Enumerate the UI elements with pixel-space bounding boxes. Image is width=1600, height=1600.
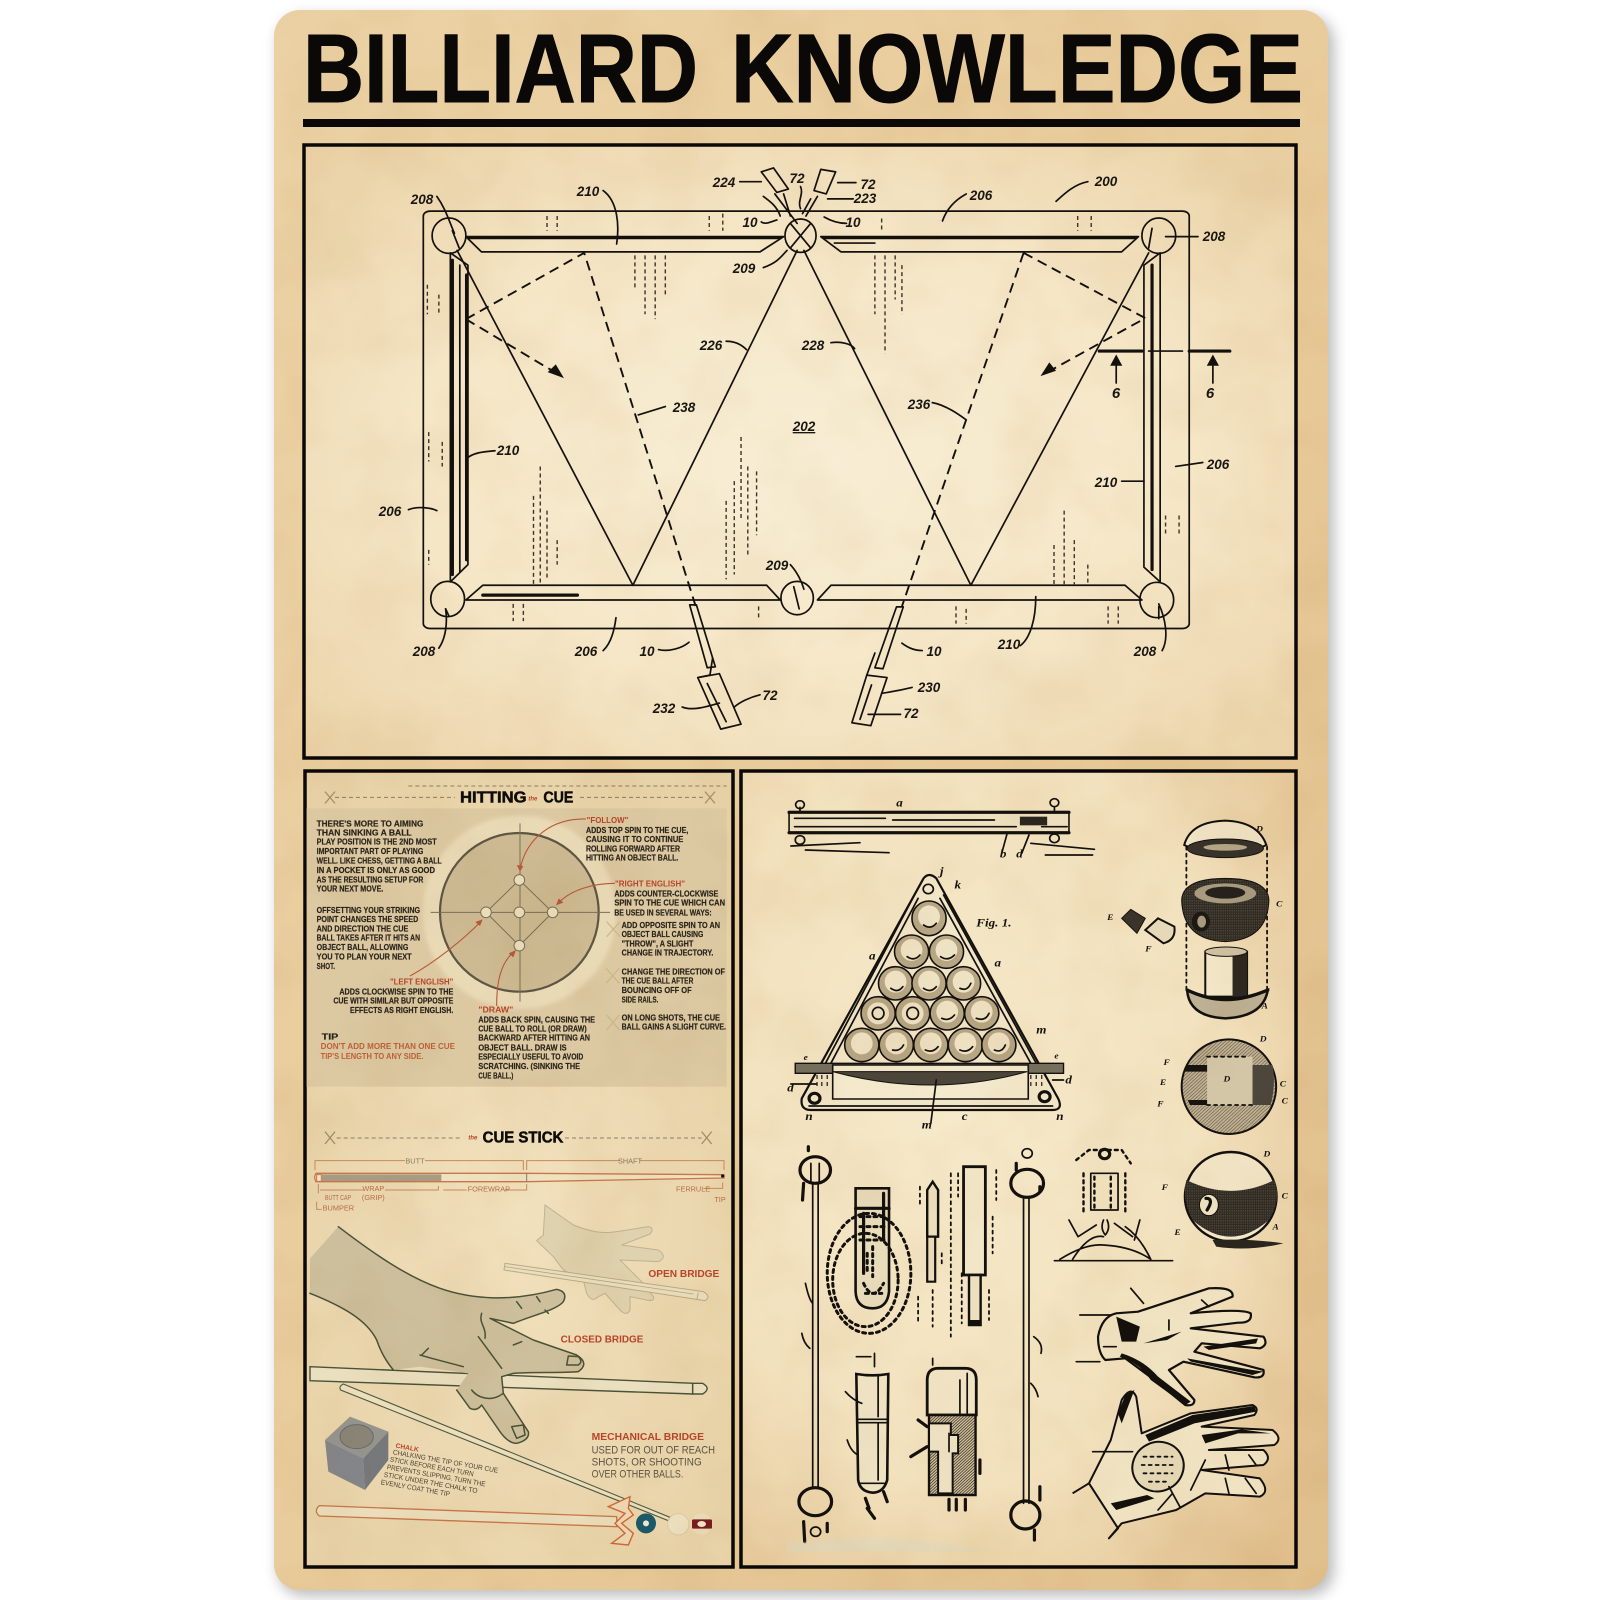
- rack bar: [795, 1063, 1064, 1073]
- chalk text: CHALK: [395, 1443, 419, 1454]
- text: uses of english with x bullets: ADD OPPOSITE SPIN TO AN: [622, 920, 720, 930]
- text: follow: CAUSING IT TO CONTINUE: [586, 834, 684, 844]
- chalk text: [380, 1441, 500, 1506]
- red arrows: [410, 819, 615, 1006]
- table reference numbers: 6: [1206, 385, 1215, 402]
- panel frame: [741, 771, 1296, 1567]
- text: draw: OBJECT BALL. DRAW IS: [478, 1042, 567, 1052]
- rack letter labels: a: [994, 956, 1001, 970]
- section ball: D: [1222, 1074, 1231, 1084]
- open bridge hand: [504, 1205, 708, 1313]
- text: aiming intro: THAN SINKING A BALL: [317, 827, 412, 837]
- text: uses of english with x bullets: THE CUE BALL AFTER: [622, 976, 694, 986]
- table reference numbers: 206: [378, 504, 402, 519]
- text: draw: CUE BALL TO ROLL (OR DRAW): [478, 1023, 587, 1033]
- table reference numbers: 206: [1206, 457, 1230, 472]
- table reference numbers: 210: [1094, 475, 1118, 490]
- table reference numbers: 208: [410, 192, 434, 207]
- exploded ball: D: [1255, 824, 1263, 834]
- rack letter labels: n: [805, 1109, 813, 1123]
- chalk text: EVENLY COAT THE TIP: [380, 1479, 451, 1498]
- leader lines: [408, 182, 1203, 714]
- text: offsetting: BALL TAKES AFTER IT HITS AN: [317, 933, 420, 943]
- chalk text: CHALKING THE TIP OF YOUR CUE: [392, 1449, 499, 1475]
- text: left english: CUE WITH SIMILAR BUT OPPOSITE: [333, 996, 454, 1006]
- table reference numbers: 208: [1202, 229, 1226, 244]
- section ball: C: [1280, 1079, 1287, 1089]
- table reference numbers: 206: [574, 644, 598, 659]
- ball rail: a: [896, 796, 903, 810]
- rack letter labels: n: [1056, 1109, 1064, 1123]
- cue anatomy diagram: (GRIP): [362, 1193, 385, 1202]
- table reference numbers: 206: [969, 188, 993, 203]
- text: offsetting: [317, 905, 420, 971]
- cue anatomy diagram: FOREWRAP: [468, 1184, 510, 1193]
- billiard balls: [636, 1513, 712, 1535]
- text: left english: "LEFT ENGLISH": [390, 977, 453, 987]
- text: offsetting: POINT CHANGES THE SPEED: [317, 914, 418, 924]
- panel: left lower infographic: [305, 771, 733, 1567]
- cue anatomy diagram: BUMPER: [323, 1203, 354, 1212]
- text: right english: "RIGHT ENGLISH": [615, 879, 685, 889]
- chalk text: PREVENTS SLIPPING. TURN THE: [386, 1464, 486, 1489]
- cue tip parts: [918, 1167, 996, 1337]
- orange cue with mechanical bridge head: [316, 1497, 633, 1545]
- exploded ball: E: [1106, 912, 1113, 922]
- cue anatomy diagram: TIP: [714, 1195, 726, 1204]
- bottom left cue: [690, 605, 741, 729]
- table reference numbers: 230: [917, 680, 941, 695]
- rack letter labels: d: [787, 1081, 795, 1095]
- text: offsetting: YOU TO PLAN YOUR NEXT: [317, 952, 412, 962]
- text: follow: ADDS TOP SPIN TO THE CUE,: [586, 825, 688, 835]
- heading: CUE STICK: [483, 1130, 564, 1147]
- section ball: F: [1162, 1057, 1170, 1067]
- text: draw: "DRAW": [478, 1004, 513, 1014]
- table reference numbers: 208: [1133, 644, 1157, 659]
- ball inserts: [1122, 909, 1145, 933]
- heading: HITTING: [460, 790, 527, 807]
- exploded ball: A: [1261, 1001, 1268, 1010]
- table reference numbers: 72: [903, 706, 919, 721]
- cue anatomy diagram: WRAP: [362, 1184, 384, 1193]
- eight ball: [1161, 1149, 1289, 1249]
- rack letter labels: j: [938, 864, 944, 878]
- exploded ball: C: [1276, 899, 1283, 909]
- table reference numbers: 202: [792, 419, 816, 434]
- table reference numbers: 223: [853, 191, 877, 206]
- table reference numbers: 10: [926, 644, 942, 659]
- long pivot rod right: [1011, 1149, 1044, 1540]
- arrow heads: [548, 362, 1056, 378]
- ball rail: d: [1016, 847, 1024, 860]
- panel: billiard table patent: [304, 145, 1296, 758]
- table diagram: [408, 168, 1230, 729]
- bottom right cue: [852, 607, 903, 726]
- mechanical bridge text: USED FOR OUT OF REACH: [592, 1445, 715, 1457]
- eight ball: D: [1262, 1149, 1271, 1159]
- rack balls: [845, 901, 1016, 1062]
- title rule: [303, 119, 1300, 127]
- chalk text: STICK BEFORE EACH TURN: [389, 1457, 474, 1478]
- cue anatomy diagram: BUTT: [405, 1156, 425, 1165]
- text: aiming intro: THERE'S MORE TO AIMING: [317, 818, 424, 828]
- heading: [325, 786, 727, 807]
- text: tip: TIP: [322, 1032, 339, 1042]
- table reference numbers: 208: [412, 644, 436, 659]
- text: follow: HITTING AN OBJECT BALL.: [586, 853, 678, 863]
- text: aiming intro: WELL. LIKE CHESS, GETTING A BALL: [317, 856, 442, 866]
- panel frame: [304, 145, 1296, 758]
- text: aiming intro: IMPORTANT PART OF PLAYING: [317, 846, 424, 856]
- text: right english: ADDS COUNTER-CLOCKWISE: [614, 888, 719, 898]
- text: left english: [333, 977, 454, 1015]
- cue anatomy diagram: [315, 1156, 726, 1212]
- panel: right lower patent drawings: [741, 771, 1296, 1567]
- text: aiming intro: PLAY POSITION IS THE 2ND MOST: [317, 837, 437, 847]
- section: the cue stick: [310, 1130, 726, 1545]
- closed bridge hand: [310, 1227, 707, 1443]
- heading: CUE: [543, 790, 574, 807]
- solid shot lines: [457, 250, 1149, 585]
- mechanical bridge pole: [340, 1384, 670, 1521]
- table reference numbers: 210: [576, 184, 600, 199]
- section mark 6-6: [1099, 349, 1230, 353]
- text: right english: SPIN TO THE CUE WHICH CAN: [614, 898, 725, 908]
- table reference numbers: 72: [789, 171, 805, 186]
- table reference numbers: 238: [672, 400, 696, 415]
- panel frame: [305, 771, 733, 1567]
- gloved hand lower: [1073, 1390, 1278, 1538]
- open bridge label: OPEN BRIDGE: [648, 1269, 720, 1280]
- rack letter labels: a: [869, 949, 876, 962]
- rack figure label: Fig. 1.: [975, 916, 1012, 930]
- text: follow: "FOLLOW": [587, 815, 628, 825]
- title: KNOWLEDGE: [731, 14, 1303, 123]
- rack letter labels: m: [922, 1118, 932, 1131]
- table outer rail: [423, 211, 1189, 628]
- table reference numbers: 209: [765, 558, 789, 573]
- exploded ball: [1106, 821, 1283, 1018]
- top cues: [761, 168, 836, 223]
- pockets: [431, 218, 1176, 619]
- text: tip: DON'T ADD MORE THAN ONE CUE: [321, 1041, 455, 1051]
- text: aiming intro: [317, 818, 442, 894]
- gloved hand upper: [1076, 1288, 1265, 1405]
- text: uses of english with x bullets: CHANGE THE DIRECTION OF: [622, 967, 725, 977]
- chalk text: STICK UNDER THE CHALK TO: [383, 1472, 478, 1495]
- mechanical bridge text: MECHANICAL BRIDGE: [592, 1432, 704, 1443]
- eight ball: E: [1173, 1227, 1181, 1237]
- text: uses of english with x bullets: [606, 920, 726, 1032]
- cue anatomy diagram: BUTT CAP: [325, 1193, 351, 1202]
- section ball: E: [1159, 1077, 1166, 1087]
- text: follow: [586, 815, 688, 863]
- table reference numbers: 236: [907, 397, 931, 412]
- text: right english: [614, 879, 725, 917]
- dashed shot lines: [466, 253, 1145, 606]
- table reference numbers: 72: [860, 177, 876, 192]
- section ball: [1156, 1034, 1289, 1134]
- rack letter labels: e: [1054, 1051, 1059, 1060]
- table reference numbers: 226: [699, 338, 723, 353]
- text: tip: TIP'S LENGTH TO ANY SIDE.: [321, 1051, 423, 1061]
- text: draw: ESPECIALLY USEFUL TO AVOID: [478, 1052, 583, 1062]
- mechanical bridge text: [592, 1432, 715, 1481]
- heading: the: [468, 1135, 478, 1141]
- text: right english: BE USED IN SEVERAL WAYS:: [614, 907, 712, 917]
- rack letter labels: e: [804, 1052, 808, 1062]
- rack letter labels: k: [954, 878, 962, 891]
- text: draw: SCRATCHING. (SINKING THE: [478, 1061, 580, 1071]
- text: offsetting: OBJECT BALL, ALLOWING: [317, 942, 409, 952]
- ball rail: [789, 796, 1094, 860]
- text: left english: EFFECTS AS RIGHT ENGLISH.: [350, 1005, 453, 1015]
- table reference numbers: 10: [845, 215, 861, 230]
- aged paper mottling: [274, 10, 1328, 1590]
- table reference numbers: 232: [652, 701, 676, 716]
- table reference numbers: 10: [639, 644, 655, 659]
- text: uses of english with x bullets: SIDE RAILS.: [622, 994, 658, 1004]
- text: offsetting: OFFSETTING YOUR STRIKING: [317, 905, 420, 915]
- spring mechanism: [1054, 1149, 1173, 1261]
- table reference numbers: 209: [732, 261, 756, 276]
- text: draw: ADDS BACK SPIN, CAUSING THE: [478, 1014, 595, 1024]
- sign drop shadow: [278, 16, 1334, 1596]
- table reference numbers: 72: [762, 688, 778, 703]
- mechanical bridge text: OVER OTHER BALLS.: [592, 1469, 683, 1481]
- rack letter labels: c: [962, 1109, 968, 1123]
- table reference numbers: 10: [742, 215, 758, 230]
- text: draw: [478, 1004, 595, 1081]
- section ball: F: [1156, 1099, 1164, 1109]
- table reference numbers: 210: [496, 443, 520, 458]
- eight ball: F: [1161, 1182, 1168, 1192]
- title: BILLIARD: [303, 14, 698, 123]
- text: draw: BACKWARD AFTER HITTING AN: [478, 1033, 590, 1043]
- table reference numbers: 210: [997, 637, 1021, 652]
- section ball: D: [1259, 1034, 1267, 1044]
- lower tip drawing: [845, 1353, 888, 1518]
- cue ball aiming diagram: [423, 816, 616, 1009]
- text: aiming intro: IN A POCKET IS ONLY AS GOOD: [317, 865, 435, 875]
- triangle rack with balls: [791, 875, 1064, 1123]
- text: aiming intro: AS THE RESULTING SETUP FOR: [317, 874, 424, 884]
- text: offsetting: SHOT.: [317, 961, 335, 971]
- exploded ball: F: [1144, 944, 1152, 954]
- sectioned block drawing: [911, 1358, 980, 1510]
- print speckle marks: [427, 214, 1179, 624]
- heading: [325, 1130, 712, 1147]
- text: uses of english with x bullets: OBJECT BALL CAUSING: [622, 929, 704, 939]
- text: uses of english with x bullets: BOUNCING OFF OF: [622, 985, 692, 995]
- text: follow: ROLLING FORWARD AFTER: [586, 843, 681, 853]
- table reference numbers: 228: [801, 338, 825, 353]
- eight ball: A: [1271, 1222, 1279, 1231]
- text: uses of english with x bullets: CHANGE IN TRAJECTORY.: [622, 948, 713, 958]
- rack letter labels: d: [1065, 1073, 1073, 1086]
- cue anatomy diagram: FERRULE: [676, 1184, 710, 1193]
- rack letter labels: [787, 864, 1073, 1131]
- text: uses of english with x bullets: BALL GAINS A SLIGHT CURVE.: [622, 1022, 726, 1032]
- faint print smudge: [785, 1538, 994, 1552]
- text: offsetting: AND DIRECTION THE CUE: [317, 923, 409, 933]
- heading: the: [528, 797, 538, 803]
- cue anatomy diagram: SHAFT: [618, 1156, 643, 1165]
- text: uses of english with x bullets: "THROW", A SLIGHT: [622, 938, 694, 948]
- speckled tip drawing: [827, 1188, 911, 1333]
- text: uses of english with x bullets: ON LONG SHOTS, THE CUE: [622, 1013, 720, 1023]
- eight ball: C: [1282, 1191, 1289, 1200]
- section ball: C: [1282, 1096, 1289, 1105]
- closed bridge label: CLOSED BRIDGE: [561, 1335, 644, 1346]
- ball rail: b: [1000, 847, 1006, 860]
- text: aiming intro: YOUR NEXT MOVE.: [317, 884, 383, 894]
- table reference numbers: 224: [712, 175, 736, 190]
- chalk cube: [325, 1417, 388, 1490]
- rack letter labels: m: [1036, 1023, 1047, 1036]
- section: hitting the cue: [307, 786, 727, 1087]
- metal sign background: [274, 10, 1328, 1590]
- text: draw: CUE BALL.): [478, 1071, 513, 1081]
- text: left english: ADDS CLOCKWISE SPIN TO THE: [339, 987, 454, 997]
- table reference numbers: [378, 171, 1230, 721]
- cushions: [450, 237, 1160, 600]
- table reference numbers: 6: [1112, 385, 1121, 402]
- text: tip: [321, 1032, 455, 1061]
- table reference numbers: 200: [1094, 174, 1118, 189]
- shaded background block: [307, 808, 727, 1087]
- mechanical bridge text: SHOTS, OR SHOOTING: [592, 1457, 702, 1469]
- long pivot rod left: [799, 1147, 832, 1542]
